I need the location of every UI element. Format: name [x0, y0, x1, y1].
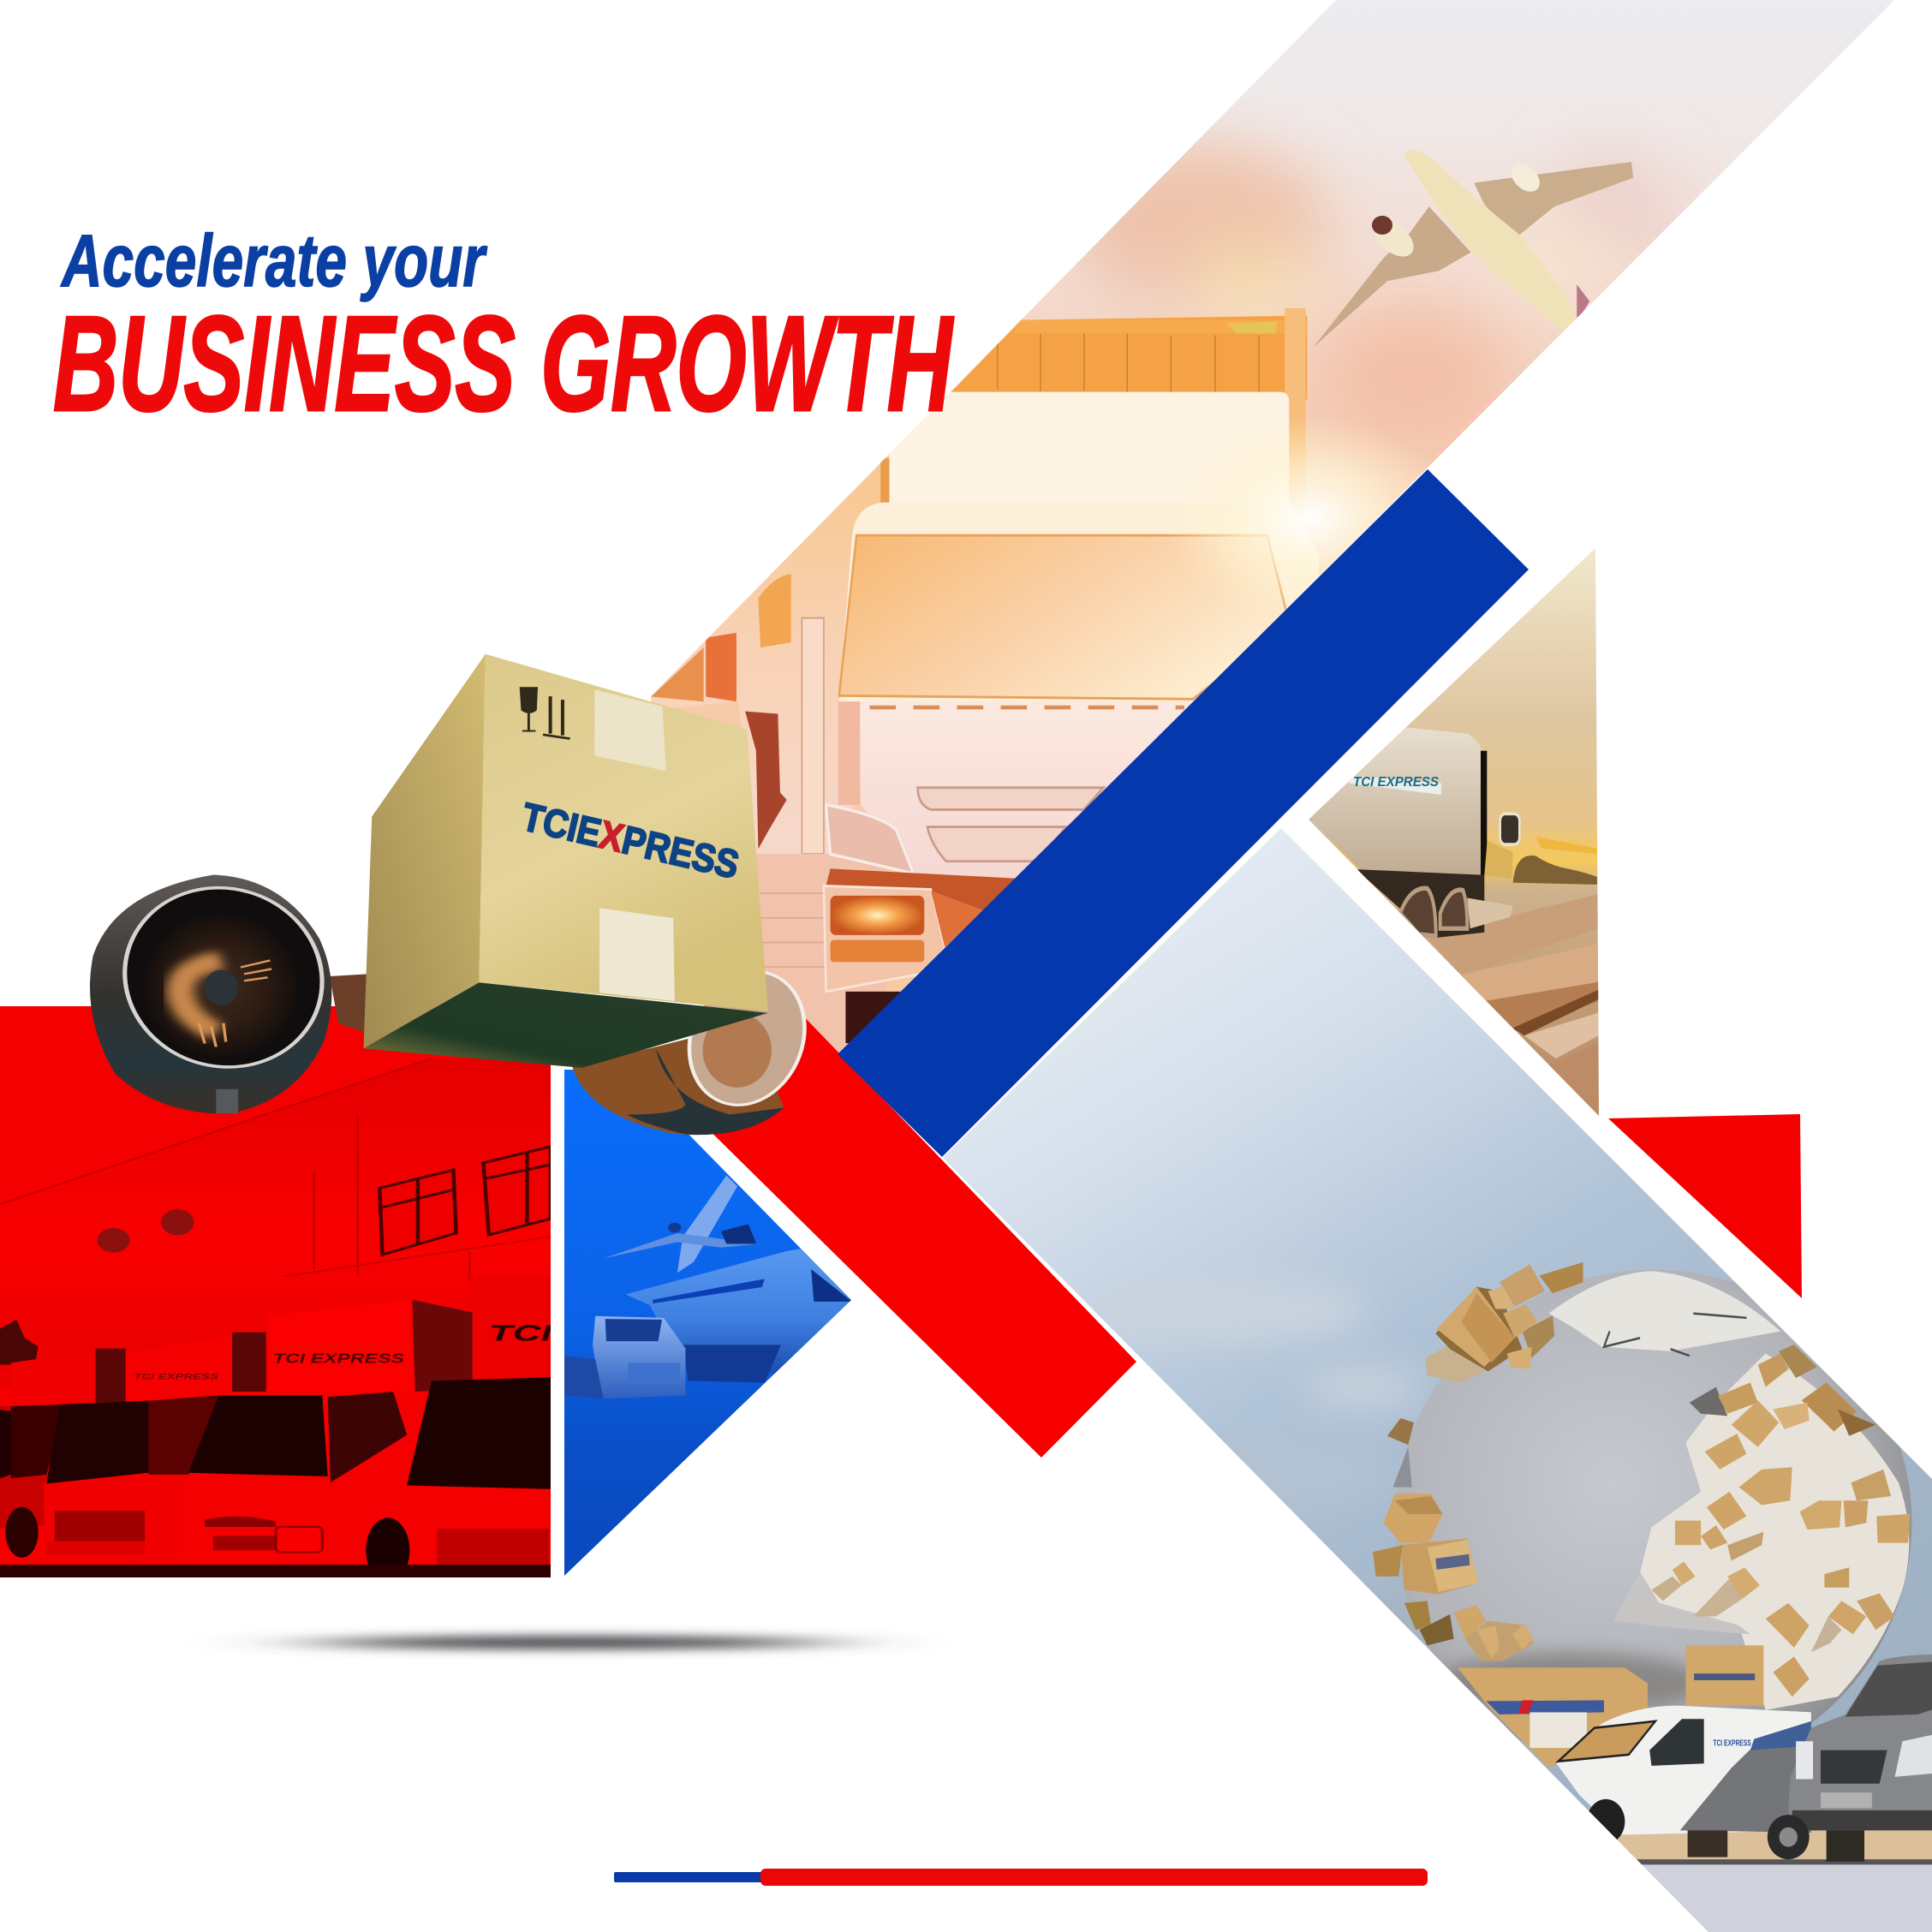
red backdrop: [0, 1006, 551, 1577]
depot building: [651, 466, 880, 855]
trailer logo: [1349, 776, 1441, 795]
engine body: [572, 1023, 784, 1135]
tape bottom: [599, 908, 675, 1001]
delivery van: [593, 1316, 685, 1399]
trailer body: [625, 1240, 852, 1374]
tape top: [594, 689, 666, 771]
dock canopy: [469, 1276, 471, 1279]
dark tree line: [0, 1320, 39, 1365]
grey van: [1768, 1655, 1932, 1862]
wheels: [1400, 888, 1467, 936]
accent line: blue and red: [614, 1869, 1428, 1886]
truck cargo boxes: [11, 1300, 473, 1404]
left pillar: [838, 701, 860, 805]
lip ring: [677, 967, 816, 1110]
continent shading: [1613, 1572, 1750, 1634]
orange shipping container: [951, 316, 1307, 400]
lip ring: [114, 882, 333, 1073]
cab pillar and mirror: [1481, 751, 1487, 875]
east cluster: [1690, 1387, 1727, 1416]
icon: left jet engine: [90, 875, 333, 1114]
ground: [756, 854, 887, 1052]
globe base shadow: [1434, 1652, 1708, 1714]
lamp housing: [824, 886, 945, 992]
diagonal bar: red: [685, 1009, 1136, 1458]
distant trees: [1513, 856, 1597, 885]
trailer: [1309, 726, 1482, 875]
heading: Accelerate your: Accelerate your: [60, 220, 487, 302]
triangle: red accent: [1608, 1114, 1802, 1298]
icon: fragile glass: [521, 688, 537, 730]
icon: TCI Express parcel: [363, 654, 768, 1068]
nacelle: [90, 875, 331, 1114]
windows: [379, 1147, 551, 1255]
bottom face: [363, 982, 768, 1068]
dusk sky and road: [1308, 546, 1601, 1119]
grille slats: [918, 788, 1103, 809]
warehouse wall: [0, 1058, 551, 1388]
west cluster: [1387, 1418, 1414, 1445]
headlight cluster: [826, 805, 914, 874]
delivery truck cabs: [0, 1377, 551, 1583]
heading: BUSINESS GROWTH: BUSINESS GROWTH: [53, 289, 954, 439]
engine arm: [330, 972, 402, 1032]
cargo body: [1285, 308, 1306, 515]
cab roof: [839, 503, 1319, 701]
cardboard boxes on globe: [1373, 1262, 1910, 1696]
white van: [1556, 1706, 1811, 1857]
parcel logo text: TCIEXPRESS: [518, 794, 743, 887]
panel: red warehouse photo: [0, 1006, 552, 1583]
fan: [143, 913, 299, 1058]
globe: [1395, 1270, 1912, 1776]
diagonal bar: blue: [838, 469, 1529, 1157]
road stripes: [1428, 894, 1599, 1112]
panel: truck on road photo: [1308, 546, 1601, 1119]
sky backdrop: [651, 0, 1901, 1062]
ground shadow: [313, 1636, 826, 1649]
continent: east: [1640, 1354, 1909, 1710]
icon: right jet engine: [572, 967, 816, 1135]
icon: airplane: [1314, 150, 1633, 347]
blue backdrop: [564, 1070, 856, 1579]
clouds: [1070, 146, 1670, 445]
continent: north: [1549, 1271, 1780, 1351]
left face: [363, 654, 486, 1048]
icon: this way up: [543, 696, 570, 739]
van lettering: TCI: [489, 1321, 552, 1346]
trailer logo text: TCI EXPRESS: [1353, 775, 1440, 790]
sun glare: [1174, 423, 1419, 610]
truck: [634, 308, 1319, 1080]
panel: blue aircraft and truck photo: [564, 1070, 856, 1579]
sky backdrop: [943, 828, 1932, 1932]
stacked parcels: [1458, 1645, 1763, 1768]
road: [1564, 1830, 1932, 1862]
cowling strap: [216, 1089, 238, 1113]
aircraft: [677, 1176, 737, 1273]
orange glow crescent: [180, 961, 221, 1032]
north cluster: [1425, 1345, 1484, 1382]
front face: [479, 654, 768, 1011]
cab lower: [860, 701, 1194, 879]
van lettering: TCI EXPRESS: [1713, 1738, 1751, 1749]
windshield: [839, 535, 1289, 699]
panel: sky with globe and vans: [943, 828, 1932, 1932]
soft clouds: [1079, 1279, 1490, 1696]
truck lettering small: TCI EXPRESS: [134, 1372, 218, 1381]
pavement shadow: [0, 1565, 551, 1579]
bumper band: [826, 868, 1018, 910]
wall vents: [98, 1209, 194, 1253]
panel: plane and truck photo strip: [634, 0, 1901, 1080]
truck lettering: TCI EXPRESS: [273, 1351, 404, 1366]
fan hub: [205, 970, 238, 1005]
